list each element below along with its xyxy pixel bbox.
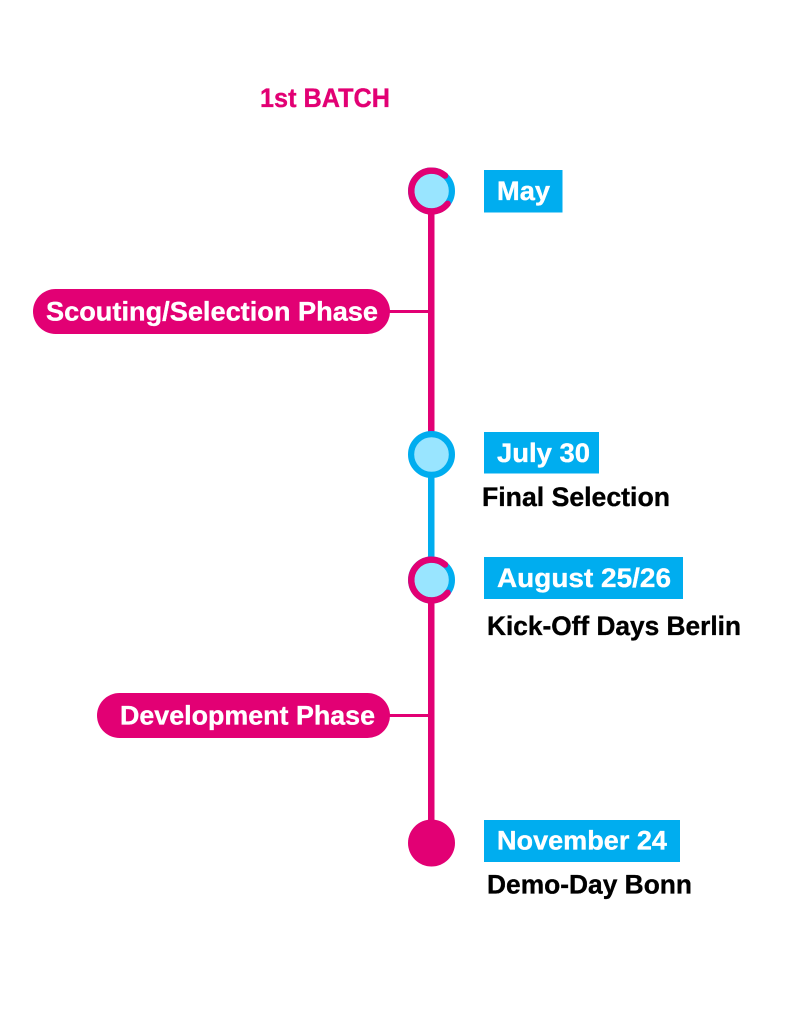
milestone label: May: May: [497, 176, 550, 206]
title: 1st BATCH: [260, 83, 390, 113]
phase pill: Scouting/Selection Phase: Scouting/Selection Phase: [46, 296, 378, 326]
description: Demo-Day Bonn: Demo-Day Bonn: [487, 870, 692, 900]
description: Kick-Off Days Berlin: Kick-Off Days Berlin: [487, 611, 741, 641]
milestone label: July 30: July 30: [497, 438, 590, 468]
milestone marker: November 24: [408, 820, 455, 866]
milestone label: July 30: [484, 432, 599, 474]
timeline line: scouting segment: [428, 205, 434, 440]
milestone marker: August 25/26: [411, 560, 452, 600]
phase pill: Development Phase: Development Phase: [120, 700, 375, 730]
milestone label: November 24: [484, 820, 680, 862]
milestone marker: July 30: [411, 434, 452, 475]
timeline line: development segment: [428, 595, 434, 830]
timeline line: selection to kick-off segment: [428, 470, 434, 565]
milestone label: August 25/26: August 25/26: [497, 563, 671, 593]
description: Final Selection: Final Selection: [482, 482, 670, 512]
phase pill: Development Phase: [97, 693, 430, 738]
milestone label: August 25/26: [484, 557, 683, 599]
phase pill: Scouting/Selection Phase: [33, 289, 430, 334]
milestone label: November 24: November 24: [497, 826, 667, 856]
milestone label: May: [484, 170, 562, 212]
milestone marker: May: [411, 171, 452, 211]
